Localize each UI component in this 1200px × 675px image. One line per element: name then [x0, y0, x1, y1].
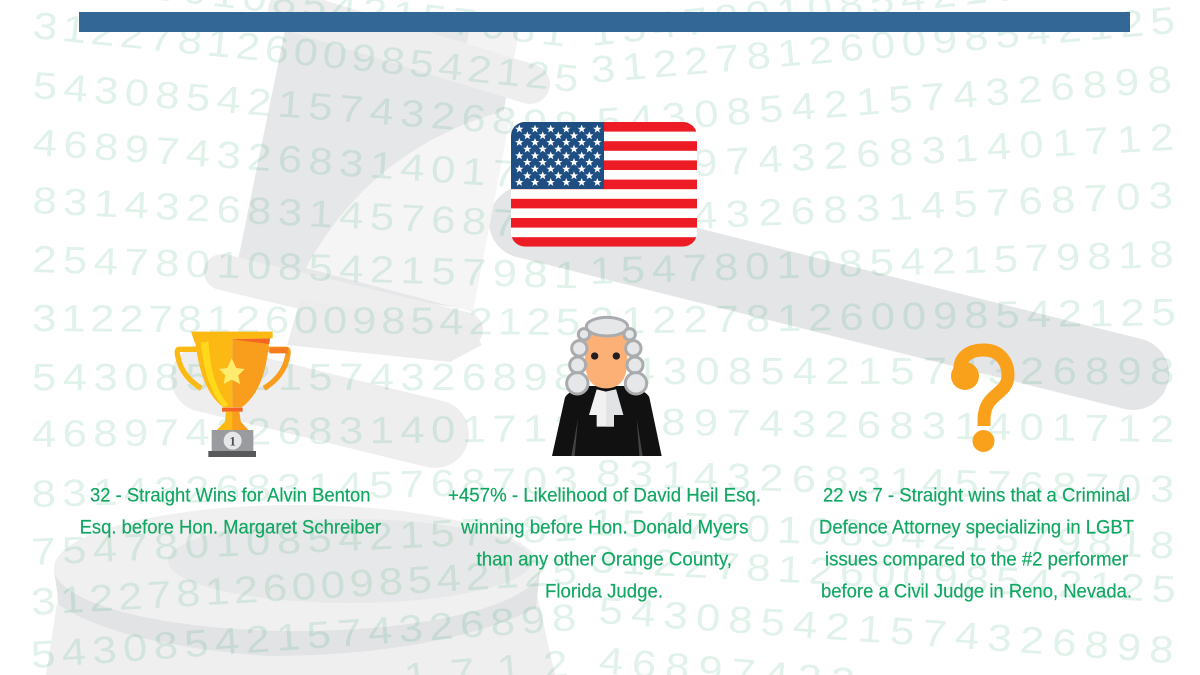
- text block: David Heil stat: Florida Judge.: [545, 581, 663, 603]
- background: number rows: 543085421574326898: [30, 596, 578, 675]
- gavel base skirt: [46, 590, 555, 675]
- background: number rows: 543085421574326898: [597, 589, 1175, 672]
- icon: trophy: [177, 332, 288, 457]
- icon: trophy: 1: [230, 434, 236, 448]
- background: number rows: 543085421574326898: [31, 64, 579, 147]
- background: number rows: 3122781260098542125: [31, 4, 581, 100]
- gavel head top band: [288, 10, 530, 84]
- text block: Alvin Benton stat: Esq. before Hon. Margaret Schreiber: [80, 517, 381, 539]
- text block: Criminal Defence Attorney stat: before a Civil Judge in Reno, Nevada.: [821, 581, 1132, 603]
- gavel head middle band: [222, 272, 465, 330]
- text block: David Heil stat: [448, 485, 761, 603]
- icon: judge: [552, 317, 662, 456]
- text block: David Heil stat: than any other Orange County,: [476, 549, 732, 571]
- background: number rows: 543085421574326898: [595, 58, 1173, 143]
- text block: Criminal Defence Attorney stat: issues compared to the #2 performer: [825, 549, 1128, 571]
- gavel base top: [54, 505, 540, 631]
- gavel head lower band: [205, 378, 435, 434]
- text block: Criminal Defence Attorney stat: Defence Attorney specializing in LGBT: [819, 517, 1134, 539]
- background: number rows: 754780108542157981: [30, 506, 578, 573]
- text block: David Heil stat: winning before Hon. Donald Myers: [460, 517, 749, 539]
- background: number rows: 3122781260098542125: [590, 538, 1177, 611]
- icon: question mark: [951, 350, 1008, 452]
- text block: Alvin Benton stat: 32 - Straight Wins for Alvin Benton: [90, 485, 370, 507]
- background: number rows: 831432683145768703: [32, 179, 579, 248]
- background: number rows: 543085421574326898: [598, 350, 1174, 392]
- background: number rows: 831432683145768703: [595, 173, 1174, 241]
- text block: Criminal Defence Attorney stat: 22 vs 7 - Straight wins that a Criminal: [823, 485, 1130, 507]
- gavel handle: [525, 222, 1133, 374]
- background: number rows: 468974326831401712: [596, 400, 1174, 450]
- background: number rows: 468974326831401712: [31, 121, 579, 200]
- background: number rows: 1547801085421579818: [590, 501, 1175, 567]
- gavel head body: [235, 20, 518, 310]
- text block: Alvin Benton stat: [80, 485, 381, 539]
- background: number rows: 3122781260098542125: [30, 550, 578, 623]
- background: number rows: 1547801085421579818: [589, 233, 1174, 292]
- icon: US flag: [511, 122, 697, 247]
- background: number rows: 3122781260098542125: [589, 0, 1177, 91]
- gavel base step: [54, 570, 540, 656]
- background: number rows: 831432683145768703: [596, 452, 1175, 510]
- background: number rows: 468974326831401712: [594, 115, 1175, 190]
- top title bar: [79, 12, 1130, 32]
- background: number rows: 831432683145768703: [31, 458, 578, 515]
- background: number rows: 3122781260098542125: [589, 291, 1176, 342]
- background: number rows: 543085421574326898: [32, 356, 578, 398]
- text block: David Heil stat: +457% - Likelihood of David Heil Esq.: [448, 485, 761, 507]
- background: number rows: 254780108542157981: [32, 238, 579, 297]
- text block: Criminal Defence Attorney stat: [819, 485, 1134, 603]
- background: number rows: 468974326831401712: [32, 407, 578, 455]
- gavel base inner ellipse: [168, 519, 532, 603]
- background: number rows: 3122781260098542125: [32, 297, 580, 343]
